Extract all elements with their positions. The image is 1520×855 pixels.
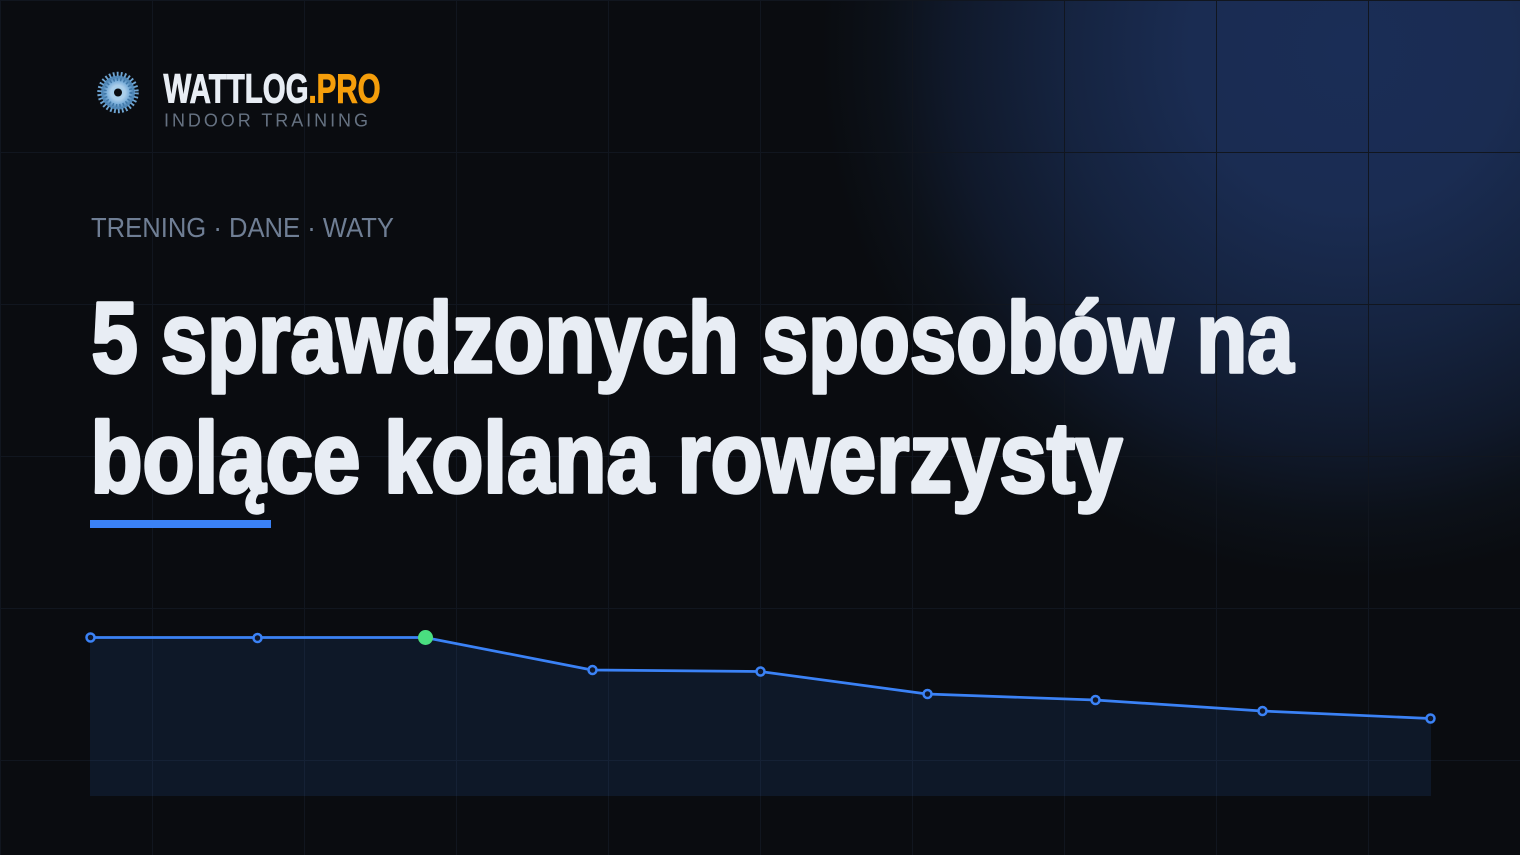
icon: cassette gear (100, 74, 136, 111)
highlighted data point (418, 630, 433, 645)
title line 1: 5 sprawdzonych sposobów na (92, 282, 1295, 394)
title (90, 282, 1295, 514)
logo (100, 66, 380, 130)
logo wordmark: WATTLOG.PRO (164, 66, 380, 112)
title underline accent (90, 520, 271, 528)
line chart (86, 630, 1434, 796)
logo subtitle: INDOOR TRAINING (164, 110, 368, 130)
title line 2: bolące kolana rowerzysty (90, 402, 1123, 514)
chart area fill (90, 638, 1431, 796)
chart data points (86, 634, 1434, 722)
tagline: TRENING · DANE · WATY (91, 212, 394, 243)
chart line (90, 638, 1430, 718)
